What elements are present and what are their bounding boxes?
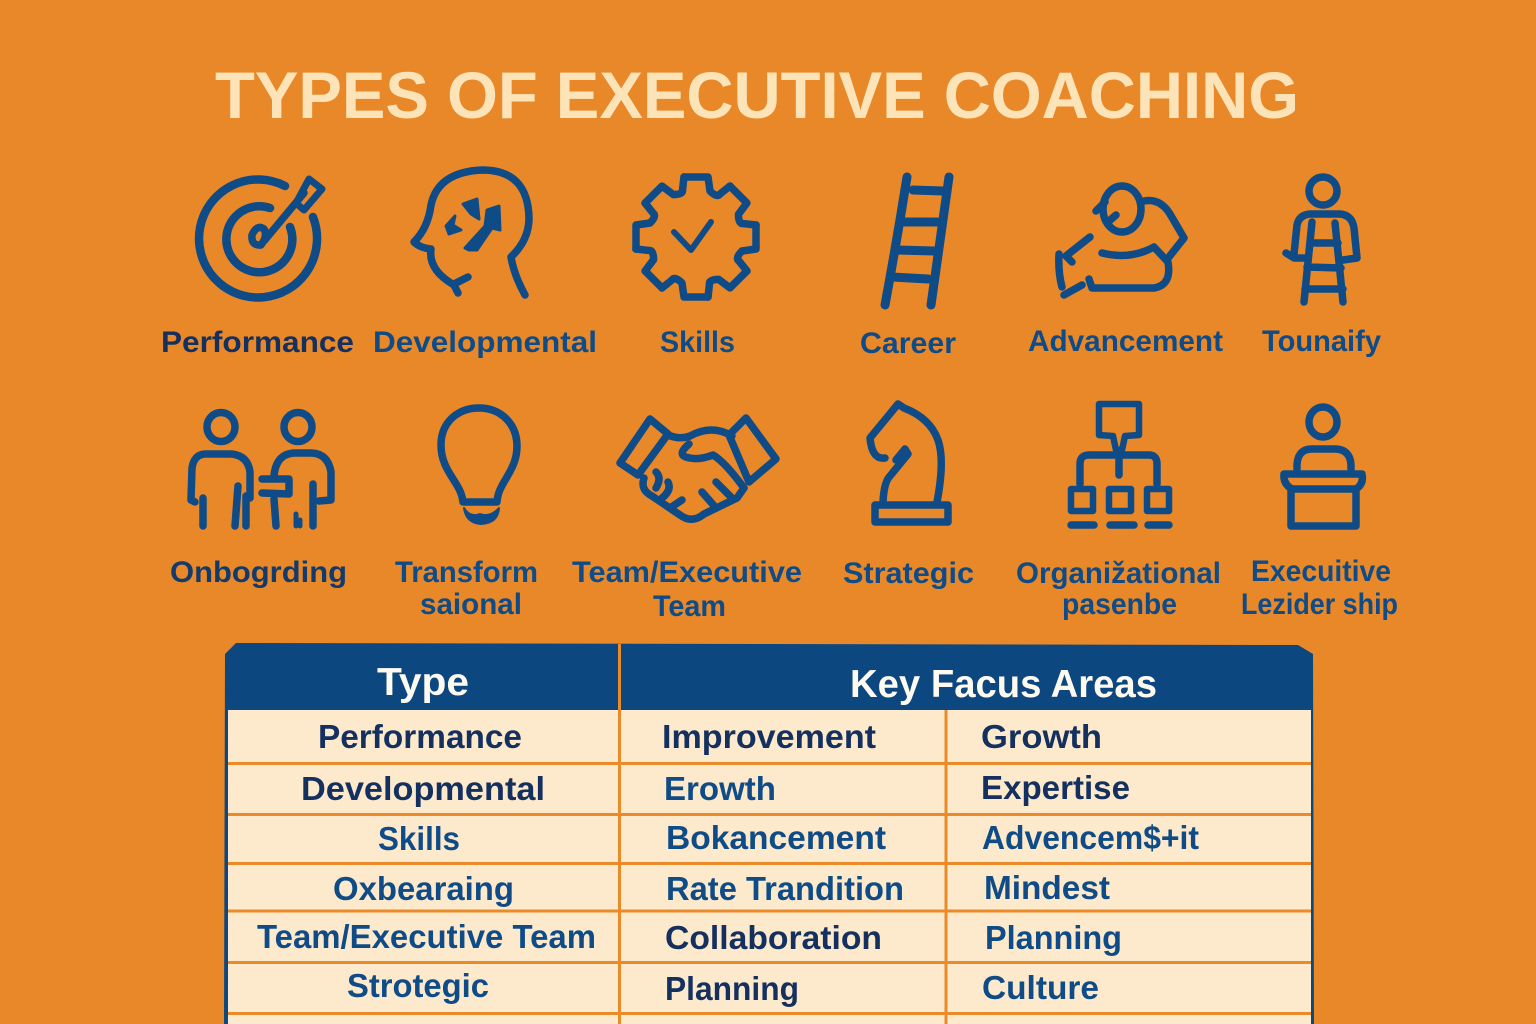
icon: ladder — [885, 177, 949, 305]
icon: gear with check — [630, 171, 762, 303]
icon: two people — [191, 412, 331, 526]
label: Tounaify: Tounaify — [1262, 325, 1381, 358]
table header: Key Focus Areas: Key Facus Areas — [850, 663, 1157, 706]
icon: target with dart — [199, 179, 322, 297]
label: Team/Executive Team: Team — [653, 590, 726, 623]
icon: head with arrows — [414, 170, 529, 295]
table column: Key Focus Areas 1: Rate Trandition — [666, 870, 904, 907]
table column: Key Focus Areas 2: Mindest — [984, 869, 1110, 906]
label: Team/Executive Team — [572, 556, 802, 623]
label: Organizational — [1016, 557, 1221, 621]
table column: Key Focus Areas 1: Erowth — [664, 770, 776, 807]
table grid — [228, 644, 1311, 1024]
label: Career: Career — [860, 327, 956, 360]
label: Advancement: Advancement — [1028, 325, 1223, 358]
label: Organizational: pasenbe — [1062, 588, 1177, 621]
table column: Type: Performance — [318, 718, 522, 755]
table header: Type: Type — [377, 661, 469, 704]
table column: Type: Skills — [378, 820, 460, 857]
icon: chess knight — [870, 404, 948, 522]
table column: Key Focus Areas 2: Advencem$+it — [982, 819, 1199, 856]
label: Strategic: Strategic — [843, 557, 974, 590]
table column: Key Focus Areas 2: Expertise — [981, 769, 1130, 806]
table column: Key Focus Areas 2: Growth — [981, 718, 1102, 755]
label: Developmental: Developmental — [373, 326, 597, 359]
icon: lightbulb — [441, 408, 517, 524]
table column: Key Focus Areas 1: Collaboration — [665, 919, 882, 956]
title: TYPES OF EXECUTIVE COACHING — [215, 58, 1299, 132]
table column: Type: Strotegic — [347, 967, 489, 1004]
table column: Type: Team/Executive Team — [257, 918, 596, 955]
table column: Key Focus Areas 1 — [662, 718, 904, 1007]
table column: Key Focus Areas 2: Planning — [985, 919, 1122, 956]
label: Onbogrding: Onbogrding — [170, 556, 347, 589]
label: Transformational: saional — [420, 588, 522, 621]
label: Skills: Skills — [660, 326, 735, 359]
label: Transformational: Transform — [395, 556, 538, 589]
table column: Key Focus Areas 2: Culture — [982, 969, 1099, 1006]
table column: Key Focus Areas 1: Bokancement — [666, 819, 886, 856]
table frame — [224, 643, 1314, 1024]
table column: Type: Developmental — [301, 770, 545, 807]
table column: Key Focus Areas 1: Improvement — [662, 718, 876, 755]
table column: Type — [257, 718, 596, 1004]
label: Performance: Performance — [161, 326, 354, 359]
table column: Type: Oxbearaing — [333, 870, 514, 907]
label: Executive Leadership: Lezider ship — [1241, 588, 1398, 621]
icon: handshake — [620, 418, 776, 519]
label: Executive Leadership — [1241, 555, 1398, 621]
icon: seated figure — [1059, 186, 1184, 295]
icon: person with ladder — [1286, 177, 1357, 302]
label: Transformational — [395, 556, 538, 621]
table column: Key Focus Areas 1: Planning — [665, 970, 799, 1007]
icon: organisation chart — [1071, 404, 1169, 525]
table body — [228, 710, 1311, 1024]
label: Team/Executive Team: Team/Executive — [572, 556, 802, 589]
label: Organizational: Organižational — [1016, 557, 1221, 590]
label: Executive Leadership: Execuitive — [1251, 555, 1391, 588]
table column: Key Focus Areas 2 — [981, 718, 1199, 1006]
table — [224, 643, 1314, 1024]
icon: person at podium — [1284, 407, 1362, 526]
